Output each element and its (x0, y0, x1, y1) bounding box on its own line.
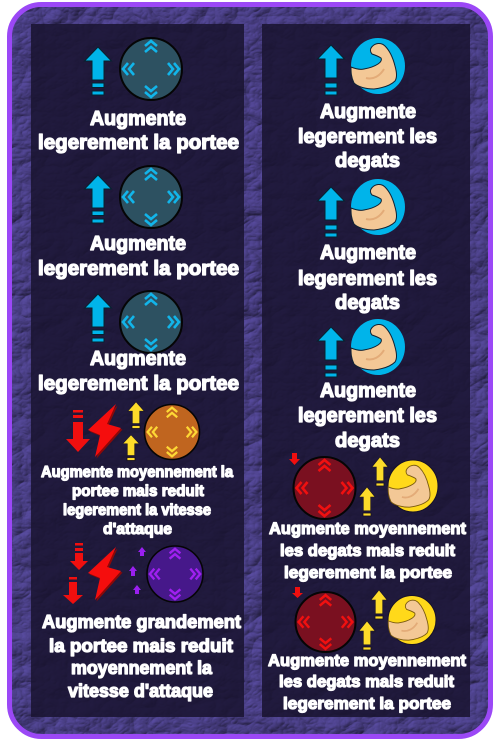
text: slight range: Augmente (90, 108, 186, 130)
text: slight range: legerement la portee (38, 258, 239, 280)
icon: blue muscle (351, 319, 405, 375)
text: medium damage: les degats mais reduit (279, 672, 454, 691)
text: large range: Augmente grandement (42, 611, 241, 632)
text: medium range: Augmente moyennement la (41, 464, 233, 481)
icon: blue up arrow (318, 45, 344, 95)
text: large range: vitesse d'attaque (68, 680, 213, 701)
icon: range circle (120, 291, 182, 353)
icon: range circle (120, 38, 182, 100)
icon: yellow muscle (388, 460, 438, 512)
text: medium damage: les degats mais reduit (280, 541, 455, 560)
text: medium damage: legerement la portee (284, 563, 452, 582)
text: large range: la portee mais reduit (49, 635, 233, 656)
icon: yellow muscle (388, 596, 436, 644)
panel: damage upgrades (262, 24, 470, 717)
icon: red range circle (294, 457, 356, 519)
text: slight range (38, 348, 239, 395)
text: slight range: legerement la portee (38, 132, 239, 154)
icon: purple range circle (147, 546, 203, 602)
text: slight damage: legerement les (298, 405, 437, 427)
icon: small red arrow (289, 453, 300, 465)
text: slight damage: degats (335, 292, 400, 314)
text: slight damage (298, 242, 437, 314)
icon: blue up arrow (84, 294, 112, 342)
text: medium damage (268, 651, 466, 713)
text: medium damage: Augmente moyennement (268, 651, 466, 670)
icon: yellow up arrows (359, 590, 387, 650)
text: medium range: d'attaque (103, 521, 172, 538)
text: large range (42, 611, 241, 701)
item: large range, slower attack (42, 543, 241, 701)
text: slight damage: Augmente (320, 380, 416, 402)
item: slight range 3 (38, 291, 239, 395)
text: slight damage: Augmente (320, 242, 416, 264)
item: slight range 2 (38, 166, 239, 280)
text: slight range: legerement la portee (38, 373, 239, 395)
text: slight damage: legerement les (298, 268, 437, 290)
text: slight damage: degats (335, 430, 400, 452)
icon: yellow up arrows (359, 457, 388, 516)
icon: range circle (120, 166, 182, 228)
text: medium range: legerement la vitesse (63, 502, 211, 519)
text: slight range (38, 108, 239, 154)
text: medium range: portee mais reduit (72, 483, 205, 500)
icon: small red arrow (292, 587, 303, 598)
icon: red range circle (296, 592, 356, 652)
text: slight damage (298, 380, 437, 452)
text: medium damage: legerement la portee (283, 694, 451, 713)
icon: blue muscle (351, 38, 405, 94)
text: slight range: Augmente (90, 233, 186, 255)
text: slight range: Augmente (90, 348, 186, 370)
icon: yellow up arrows (123, 402, 144, 460)
item: medium damage, less range 1 (269, 453, 466, 582)
text: medium damage (269, 519, 466, 582)
icon: orange range circle (144, 404, 200, 460)
icon: blue up arrow (84, 175, 112, 223)
panel: range upgrades (31, 24, 244, 717)
icon: blue muscle (351, 179, 405, 235)
text: slight damage: legerement les (298, 126, 437, 148)
text: slight range (38, 233, 239, 280)
text: medium range (41, 464, 233, 538)
text: slight damage (298, 101, 437, 172)
icon: lightning bolt (88, 404, 122, 458)
item: slight damage 1 (298, 38, 437, 172)
icon: blue up arrow (84, 47, 112, 95)
text: large range: moyennement la (71, 657, 213, 678)
text: slight damage: degats (335, 150, 400, 172)
icon: lightning bolt (88, 547, 122, 602)
icon: red down arrows (63, 543, 88, 604)
icon: small purple arrows (129, 547, 146, 594)
item: slight range 1 (38, 38, 239, 154)
text: slight damage: Augmente (320, 101, 416, 123)
item: slight damage 2 (298, 179, 437, 314)
item: medium range, slower attack (41, 402, 233, 538)
icon: blue up arrow (318, 327, 344, 377)
icon: blue up arrow (318, 187, 344, 237)
icon: red down arrow (66, 410, 90, 452)
item: slight damage 3 (298, 319, 437, 452)
text: medium damage: Augmente moyennement (269, 519, 466, 538)
item: medium damage, less range 2 (268, 587, 466, 713)
